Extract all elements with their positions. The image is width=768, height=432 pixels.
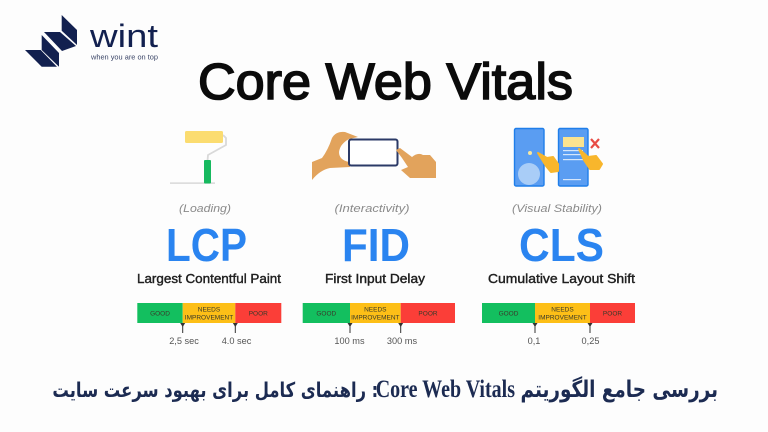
subtitle banner [52,376,718,403]
logo mark [25,15,77,67]
metric description: Largest Contentful Paint [137,272,282,286]
threshold values: 0,25 [582,336,599,346]
threshold bar [482,303,635,323]
threshold bar: GOOD [499,310,519,318]
column: CLS [482,203,636,346]
threshold markers [180,323,238,333]
logo wordmark: wint [89,18,158,54]
column: FID [303,203,455,346]
metric name: CLS [519,219,604,271]
threshold values: 100 ms [334,336,365,346]
category label: (Interactivity) [334,203,410,215]
threshold bar: IMPROVEMENT [538,314,587,322]
threshold bar: NEEDS [364,306,387,314]
threshold values: 4.0 sec [222,336,252,346]
threshold bar: GOOD [150,310,170,318]
threshold bar: POOR [418,310,438,318]
threshold values [334,336,417,346]
subtitle banner: بررسی جامع الگوریتم Core Web Vitals [376,376,718,403]
logo tagline: when you are on top [90,52,158,62]
category label: (Visual Stability) [512,203,602,215]
threshold values: 300 ms [387,336,417,346]
threshold bar: IMPROVEMENT [351,314,400,322]
icon: paint roller [170,131,226,184]
threshold bar: NEEDS [551,306,574,314]
threshold bar: GOOD [316,310,337,318]
threshold bar [137,303,281,323]
threshold bar: POOR [603,310,622,318]
logo: wint [25,15,158,67]
category label: (Loading) [179,203,231,215]
threshold values: 2,5 sec [169,336,199,346]
threshold bar: NEEDS [198,306,221,314]
threshold values [528,336,599,346]
subtitle banner: : راهنمای کامل برای بهبود سرعت سایت [52,378,378,402]
metric name: LCP [166,219,247,271]
metric name: FID [342,219,410,271]
threshold bar: POOR [249,310,268,318]
threshold markers [532,323,592,333]
threshold markers [348,323,403,333]
title: Core Web Vitals [198,53,573,110]
icon: hands holding phone [312,132,436,180]
threshold bar: IMPROVEMENT [185,314,233,322]
threshold values: 0,1 [528,336,540,346]
column: LCP [137,203,282,346]
metric description: First Input Delay [325,272,426,286]
metric description: Cumulative Layout Shift [488,272,636,286]
threshold bar [303,303,455,323]
icon: layout shift screens [514,128,602,186]
threshold values [169,336,252,346]
